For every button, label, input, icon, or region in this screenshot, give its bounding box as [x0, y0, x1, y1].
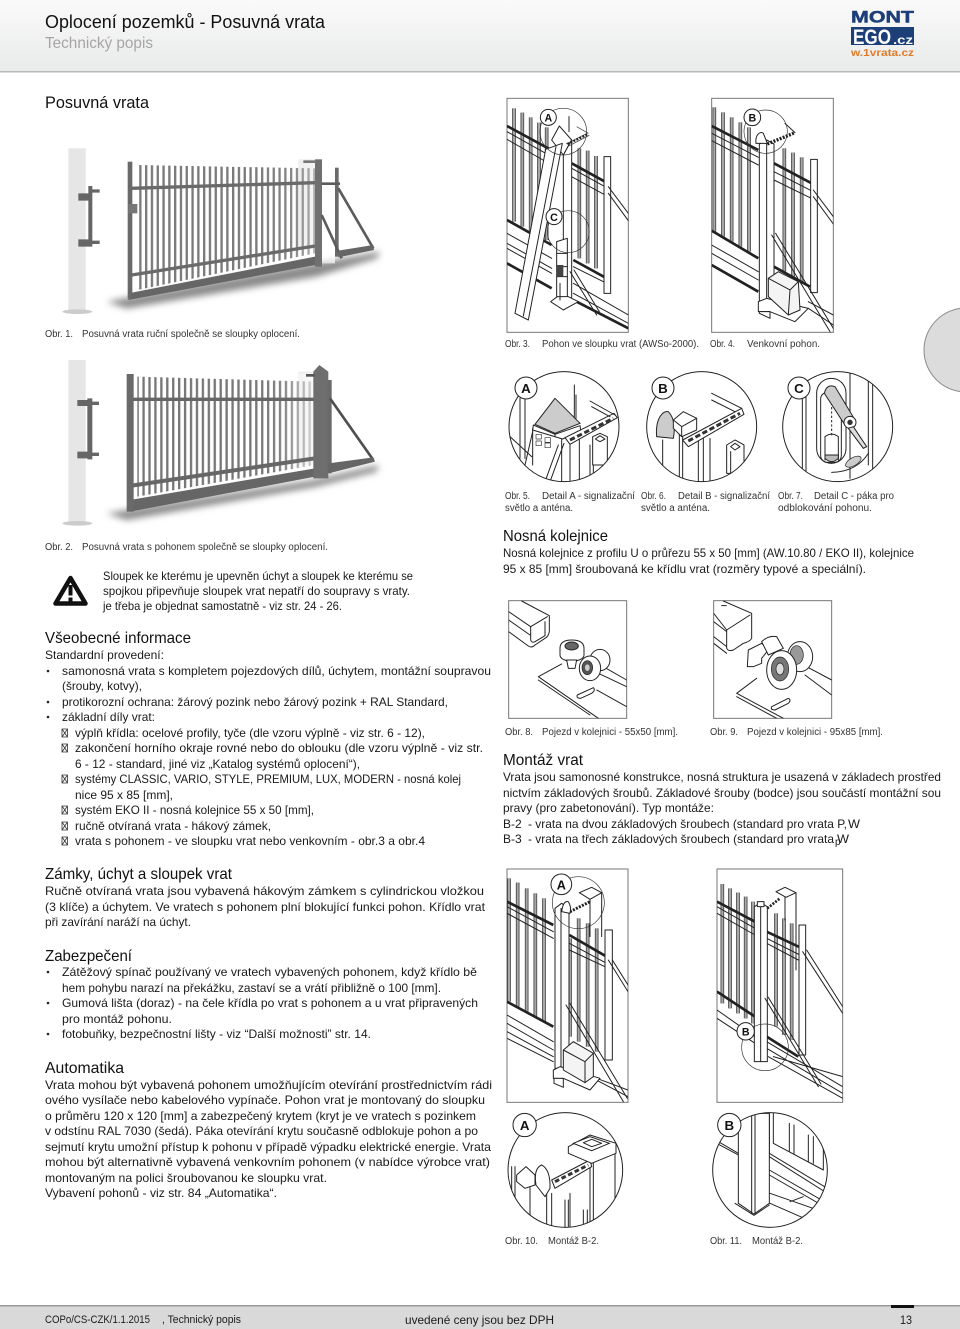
text block: gate installation: - vrata na dvou základových šroubech (standard pro vrata P,: [528, 817, 847, 831]
captions: Obr. 8 and Obr. 9: Pojezd v kolejnici - 55x50 [mm].: [542, 727, 678, 738]
captions: Obr. 10 and Obr. 11: [505, 1236, 803, 1247]
text block: automation: Vrata mohou být vybavená pohonem umožňujícím otevírání prostřednictvím rádi: [45, 1078, 492, 1092]
captions: Obr. 5, 6 and 7: Detail A - signalizační: [542, 491, 635, 502]
captions: Obr. 5, 6 and 7: odblokování pohonu.: [778, 503, 872, 514]
captions: Obr. 5, 6 and 7: Obr. 6.: [641, 491, 666, 502]
captions: Obr. 5, 6 and 7: Obr. 7.: [778, 491, 803, 502]
text block: carrier rail: 95 x 85 [mm] šroubovaná ke křídlu vrat (rozměry typové a speciální).: [503, 562, 866, 576]
captions: Obr. 10 and Obr. 11: Obr. 11.: [710, 1236, 742, 1247]
text block: automation: sejmutí krytu umožní přístup k pohonu v případě výpadku elektrické energie. Vrata: [45, 1140, 491, 1154]
text block: safety: [45, 948, 478, 1041]
captions: Obr. 3 and Obr. 4: [505, 339, 820, 350]
text block: automation: Automatika: [45, 1060, 124, 1077]
detail circle A (Obr. 10): A: [520, 1118, 530, 1133]
footer document code: [45, 1314, 241, 1326]
figure: trolley in 55x50 rail (Obr. 8): [509, 601, 627, 718]
text block: carrier rail: [503, 528, 914, 576]
figure: external drive (Obr. 4): B: [748, 113, 756, 125]
detail circle C (Obr. 7): [783, 372, 893, 482]
captions: Obr. 3 and Obr. 4: Pohon ve sloupku vrat (AWSo-2000).: [542, 339, 699, 350]
figure: installation B-2 base (Obr. 11): B: [742, 1027, 750, 1039]
text block: safety: Zabezpečení: [45, 948, 133, 965]
text block: general information: zakončení horního okraje rovné nebo do oblouku (dle vzoru výplně - viz str.: [75, 741, 483, 755]
text block: locks: (3 klíče) a úchytem. Ve vratech s pohonem plní blokující funkci pohon. Křídlo vrat: [45, 900, 486, 914]
warning note: Sloupek ke kterému je upevněn úchyt a sloupek ke kterému se: [103, 569, 413, 583]
text block: safety: pro montáž pohonu.: [62, 1012, 172, 1026]
footer document code: COPo/CS-CZK/1.1.2015: [45, 1314, 150, 1326]
text block: general information: (šrouby, kotvy),: [62, 679, 142, 693]
captions: Obr. 3 and Obr. 4: Venkovní pohon.: [747, 339, 820, 350]
text block: safety: Gumová lišta (doraz) - na čele křídla po vrat s pohonem a u vrat připravených: [62, 996, 478, 1010]
captions: Obr. 5, 6 and 7: Detail B - signalizační: [678, 491, 770, 502]
icon: warning triangle: [56, 578, 86, 604]
text block: gate installation: Vrata jsou samonosné konstrukce, nosná struktura je usazená v základech prostřed: [503, 770, 941, 784]
text block: general information: protikorozní ochrana: žárový pozink nebo žárový pozink + RAL Standard,: [62, 695, 448, 709]
text block: automation: montovaným na polici šroubovanou ke sloupku vrat.: [45, 1171, 327, 1185]
text block: automation: v odstínu RAL 7030 (šedá). Páka otevírání krytu současně odblokuje pohon a po: [45, 1124, 478, 1138]
text block: general information: systémy CLASSIC, VARIO, STYLE, PREMIUM, LUX, MODERN - nosná kolej: [75, 772, 461, 786]
captions: Obr. 3 and Obr. 4: Obr. 3.: [505, 339, 530, 350]
captions: Obr. 10 and Obr. 11: Obr. 10.: [505, 1236, 538, 1247]
captions: Obr. 5, 6 and 7: Detail C - páka pro: [814, 491, 894, 502]
text block: gate installation: p: [835, 837, 841, 848]
logo: EGO: [853, 26, 891, 49]
text block: gate installation: B-2: [503, 817, 522, 831]
text block: general information: samonosná vrata s kompletem pojezdových dílů, úchytem, montážní soupravou: [62, 664, 491, 678]
captions: Obr. 10 and Obr. 11: Montáž B-2.: [548, 1236, 599, 1247]
footer document code: , Technický popis: [162, 1314, 241, 1326]
text block: general information: vrata s pohonem - ve sloupku vrat nebo venkovním - obr.3 a obr.4: [75, 834, 425, 848]
text block: carrier rail: Nosná kolejnice: [503, 528, 608, 545]
detail circle B (Obr. 11): B: [725, 1118, 735, 1133]
text block: gate installation: W: [837, 832, 850, 846]
illustration: manual sliding gate: [62, 148, 380, 314]
caption: Obr. 1: Posuvná vrata ruční společně se sloupky oplocení.: [82, 329, 300, 340]
figure: drive in gate post (Obr. 3): [507, 98, 628, 332]
text block: gate installation: W: [848, 817, 861, 831]
text block: carrier rail: Nosná kolejnice z profilu U o průřezu 55 x 50 [mm] (AW.10.80 / EKO II), kolejnice: [503, 546, 914, 560]
round page tab: [924, 308, 960, 392]
footer price note: uvedené ceny jsou bez DPH: [405, 1313, 554, 1327]
captions: Obr. 5, 6 and 7: Obr. 5.: [505, 491, 530, 502]
caption: Obr. 2: Obr. 2.: [45, 542, 73, 553]
text block: locks: při zavírání naráží na úchyt.: [45, 915, 191, 929]
caption: Obr. 2: Posuvná vrata s pohonem společně se sloupky oplocení.: [82, 542, 328, 553]
text block: safety: Zátěžový spínač používaný ve vratech vybavených pohonem, když křídlo bě: [62, 965, 477, 979]
detail circle C (Obr. 7): C: [794, 381, 804, 396]
footer band: [0, 1305, 960, 1329]
warning note: spojkou připevňuje sloupek vrat nepatří do soupravy s vraty.: [103, 584, 410, 598]
text block: safety: hem pohybu narazí na překážku, zastaví se a vrátí přibližně o 100 [mm].: [62, 981, 441, 995]
detail circle A (Obr. 5): [509, 372, 619, 482]
detail circle B (Obr. 6): B: [658, 381, 668, 396]
text block: automation: ového vysílače nebo kabelového vypínače. Pohon vrat je montovaný do sloupku: [45, 1093, 485, 1107]
logo: w.1vrata.cz: [850, 48, 914, 59]
text block: general information: ručně otvíraná vrata - hákový zámek,: [75, 819, 271, 833]
text block: general information: Všeobecné informace: [45, 630, 191, 647]
text block: automation: o průměru 120 x 120 [mm] a zabezpečený krytem (kryt je ve vratech s pozinkem: [45, 1109, 476, 1123]
captions: Obr. 8 and Obr. 9: [505, 727, 883, 738]
logo: MONT: [851, 8, 915, 26]
text block: gate installation: nictvím základových šroubů. Základové šrouby (bodce) jsou součástí montážní sou: [503, 786, 941, 800]
text block: gate installation: - vrata na třech základových šroubech (standard pro vrata: [528, 832, 834, 846]
text block: automation: mohou být alternativně vybavená venkovním pohonem (v nabídce výrobce vrat): [45, 1155, 490, 1169]
text block: gate installation: [503, 752, 941, 848]
detail circle B (Obr. 6): [647, 372, 757, 482]
warning note: je třeba je objednat samostatně - viz str. 24 - 26.: [102, 599, 342, 613]
text block: automation: Vybavení pohonů - viz str. 84 „Automatika“.: [45, 1186, 277, 1200]
figure: installation B-2 with drive (Obr. 10): [507, 869, 628, 1102]
figure: installation B-2 with drive (Obr. 10): A: [557, 878, 566, 892]
text block: safety: fotobuňky, bezpečnostní lišty - viz “Další možnosti” str. 14.: [62, 1027, 371, 1041]
text block: general information: 6 - 12 - standard, jiné viz „Katalog systémů oplocení“),: [75, 757, 360, 771]
detail circle A (Obr. 5): A: [521, 381, 531, 396]
warning note: [102, 569, 413, 613]
captions: Obr. 5, 6 and 7: světlo a anténa.: [505, 503, 573, 514]
figure: external drive (Obr. 4): [712, 98, 833, 332]
text block: automation: [45, 1060, 492, 1200]
text block: general information: Standardní provedení:: [45, 648, 164, 662]
captions: Obr. 5, 6 and 7: světlo a anténa.: [641, 503, 710, 514]
text block: locks: Ručně otvíraná vrata jsou vybavená hákovým zámkem s cylindrickou vložkou: [45, 884, 484, 898]
text block: locks: Zámky, úchyt a sloupek vrat: [45, 866, 233, 883]
detail circle B (Obr. 11): [713, 1113, 827, 1227]
figure: drive in gate post (Obr. 3): A: [544, 113, 552, 125]
header band: [0, 0, 960, 72]
illustration: motorised sliding gate: [62, 360, 378, 526]
logo: .cz: [893, 33, 913, 47]
text block: gate installation: Montáž vrat: [503, 752, 584, 769]
figure: drive in gate post (Obr. 3): C: [550, 212, 558, 224]
text block: general information: základní díly vrat:: [62, 710, 155, 724]
page number: 13: [900, 1313, 912, 1327]
text block: gate installation: B-3: [503, 832, 522, 846]
caption: Obr. 1: Obr. 1.: [45, 329, 73, 340]
figure: installation B-2 base (Obr. 11): [717, 869, 843, 1102]
section heading: Posuvná vrata: [45, 93, 150, 112]
captions: Obr. 8 and Obr. 9: Obr. 8.: [505, 727, 533, 738]
text block: general information: systém EKO II - nosná kolejnice 55 x 50 [mm],: [75, 803, 314, 817]
logo: [850, 8, 915, 59]
captions: Obr. 5, 6 and 7: [505, 491, 894, 514]
captions: Obr. 8 and Obr. 9: Pojezd v kolejnici - 95x85 [mm].: [747, 727, 883, 738]
text block: locks: [45, 866, 486, 929]
detail circle A (Obr. 10): [508, 1113, 623, 1227]
captions: Obr. 10 and Obr. 11: Montáž B-2.: [752, 1236, 803, 1247]
title: Oplocení pozemků - Posuvná vrata: [45, 12, 326, 32]
text block: gate installation: pravy (pro zabetonování). Typ montáže:: [503, 801, 714, 815]
captions: Obr. 3 and Obr. 4: Obr. 4.: [710, 339, 735, 350]
figure: trolley in 95x85 rail (Obr. 9): [714, 601, 832, 718]
text block: general information: výplň křídla: ocelové profily, tyče (dle vzoru výplně - viz str. 6 - 12),: [75, 726, 425, 740]
text block: general information: nice 95 x 85 [mm],: [75, 788, 173, 802]
text block: general information: [45, 630, 491, 848]
subtitle: Technický popis: [45, 35, 153, 52]
captions: Obr. 8 and Obr. 9: Obr. 9.: [710, 727, 738, 738]
